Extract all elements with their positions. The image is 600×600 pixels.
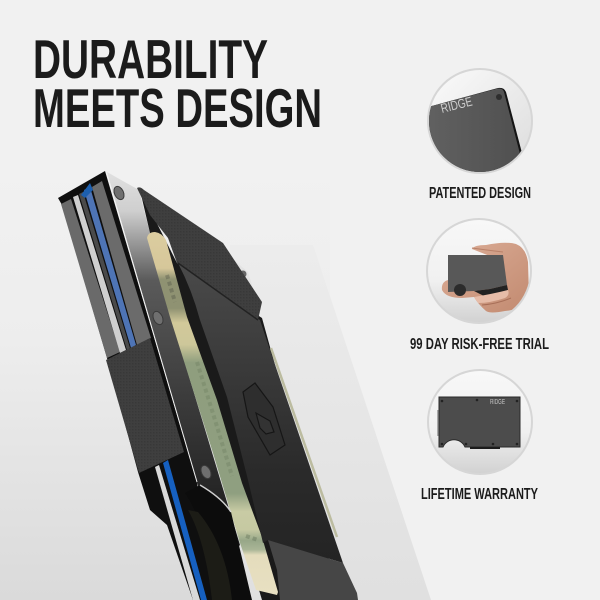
title: MEETS DESIGN — [33, 77, 322, 139]
title — [33, 28, 322, 139]
bottom strap — [268, 540, 358, 600]
money clip ring — [185, 485, 252, 600]
label: LIFETIME WARRANTY — [421, 486, 538, 503]
wallet side face — [58, 171, 215, 600]
wallet illustration — [58, 171, 358, 600]
screws — [112, 185, 213, 480]
feature: lifetime warranty — [421, 369, 538, 503]
feature: 99 day trial — [410, 218, 549, 353]
icon: card corner in circle: RIDGE — [439, 94, 474, 116]
label: PATENTED DESIGN — [429, 185, 531, 202]
top strap — [137, 187, 262, 320]
label: 99 DAY RISK-FREE TRIAL — [410, 336, 549, 353]
icon: wallet front view: RIDGE — [490, 399, 505, 406]
strap lower shadow — [178, 263, 258, 320]
metal inner plate — [107, 172, 240, 560]
left elastic band — [106, 338, 184, 473]
wallet lower spine and blue stripe — [155, 460, 207, 600]
cream plate edge — [271, 348, 337, 537]
bill engraving texture — [167, 275, 258, 540]
ridge logo emboss — [243, 383, 285, 455]
feature: patented design — [420, 68, 533, 202]
main black plate — [178, 263, 343, 563]
icon: hand holding card — [426, 218, 532, 324]
dollar bill — [147, 232, 278, 595]
plate edge highlight — [108, 178, 197, 482]
metal corner behind strap — [228, 255, 256, 298]
title: DURABILITY — [33, 28, 268, 90]
dark slot behind bill and main plate — [140, 190, 340, 600]
